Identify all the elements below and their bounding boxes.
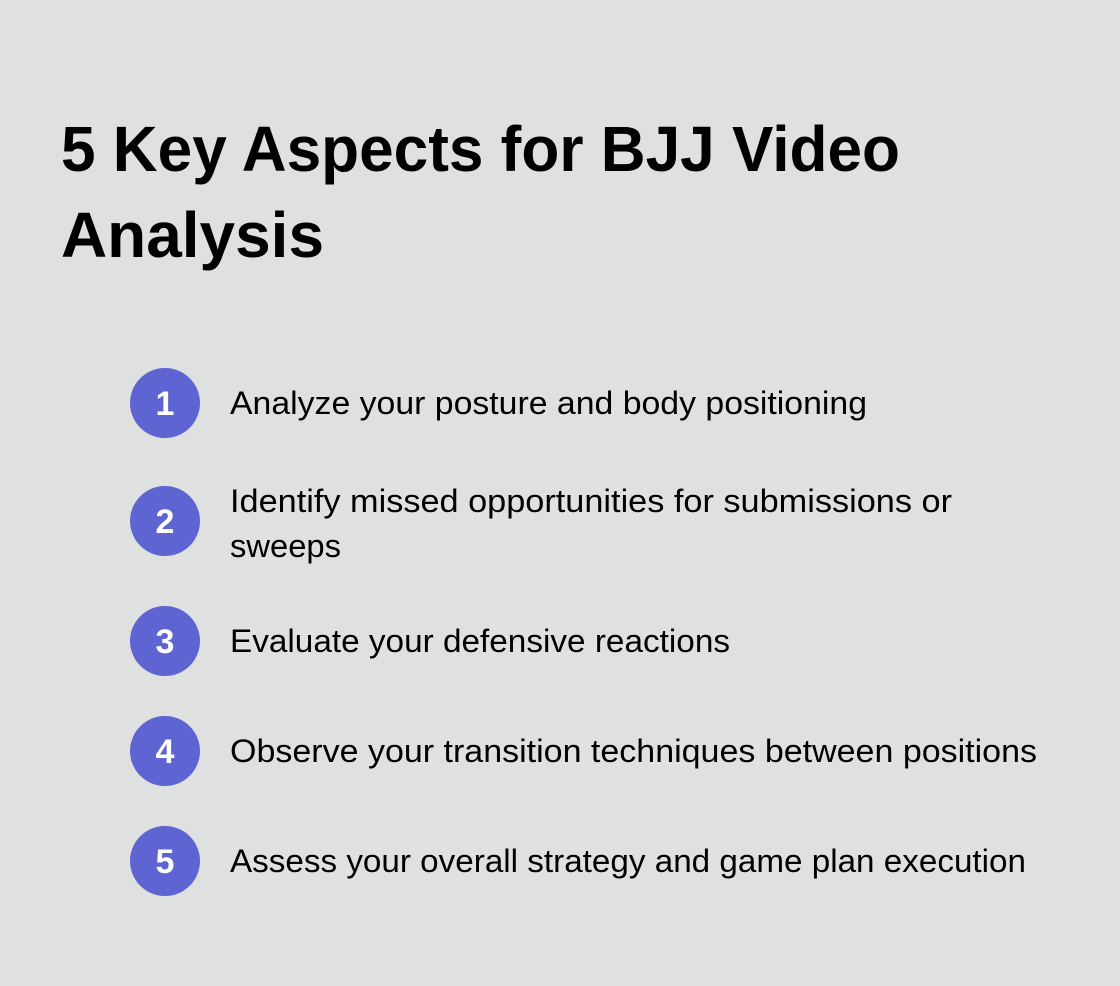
item 3 text: Evaluate your defensive reactions [230, 623, 730, 659]
item 3 [130, 606, 730, 676]
number badge 5: 5 [156, 843, 174, 881]
number badge 4 [130, 716, 200, 786]
item 2 [130, 483, 952, 564]
title: Analysis [61, 199, 324, 271]
number badge 2 [130, 486, 200, 556]
item 1 text: Analyze your posture and body positioning [230, 385, 867, 421]
item 4 [130, 716, 1037, 786]
item 2 text: Identify missed opportunities for submissions or [230, 483, 952, 519]
item 5 text: Assess your overall strategy and game plan execution [230, 843, 1026, 879]
item 2 text: sweeps [230, 528, 341, 564]
number badge 3: 3 [156, 623, 174, 661]
number badge 4: 4 [156, 733, 175, 771]
item 2 text [230, 483, 952, 564]
title: 5 Key Aspects for BJJ Video [61, 113, 900, 185]
number badge 2: 2 [156, 503, 174, 541]
list of five aspects [130, 368, 1037, 896]
number badge 1: 1 [156, 385, 174, 423]
item 1 [130, 368, 867, 438]
item 5 [130, 826, 1026, 896]
number badge 5 [130, 826, 200, 896]
number badge 3 [130, 606, 200, 676]
title [61, 113, 900, 271]
number badge 1 [130, 368, 200, 438]
item 4 text: Observe your transition techniques between positions [230, 733, 1037, 769]
